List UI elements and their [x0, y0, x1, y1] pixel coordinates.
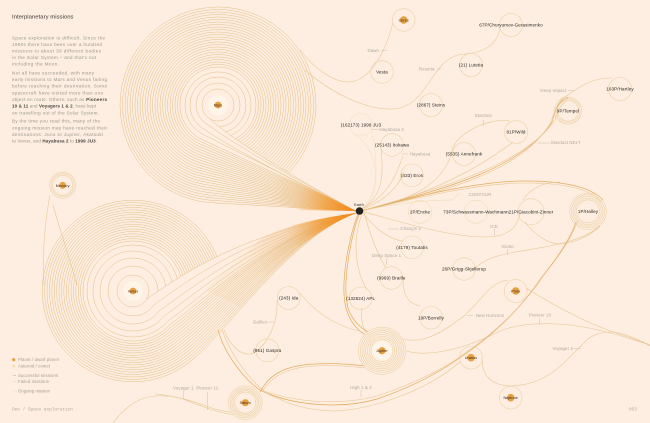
planet: Earth	[354, 203, 364, 215]
asteroid: Steins	[417, 94, 446, 116]
intro text: 1950s there have been over a hundred	[12, 42, 102, 47]
comet: Encke: 2P/Encke	[410, 209, 430, 214]
label: CONTOUR: CONTOUR	[469, 192, 491, 197]
Venus mission rings	[42, 200, 224, 382]
label: Pioneer 10	[529, 312, 552, 325]
label: Galileo: Galileo	[253, 320, 268, 324]
label: Giotto: Giotto	[502, 244, 514, 249]
asteroid: Steins: (2867) Steins	[417, 103, 446, 108]
comet: 67P	[479, 14, 543, 36]
Dawn path	[300, 22, 393, 82]
Venus mission trajectories	[147, 213, 356, 365]
comet: Hartley 2: 103P/Hartley	[606, 87, 634, 92]
Voyager 1 path	[113, 396, 240, 423]
asteroid: Braille	[377, 267, 406, 289]
planet: Venus: Venus	[128, 290, 138, 294]
intro text: before reaching their destination. Some	[12, 84, 107, 89]
intro text: Space exploration is difficult. Since the	[12, 35, 105, 40]
label: ICE: ICE	[490, 224, 498, 229]
Hayabusa and Eros paths	[362, 148, 404, 210]
planet: Saturn	[228, 386, 262, 420]
legend: ongoing: Ongoing mission	[18, 388, 51, 394]
asteroid: Lutetia: (21) Lutetia	[459, 63, 483, 68]
Chang'e 2 path	[362, 212, 402, 241]
comet: Grigg-Skjellerup	[442, 258, 486, 280]
comet: 67P: 67P/Churyumov-Gerasimenko	[479, 23, 543, 28]
label: Giotto	[502, 244, 514, 255]
label: Pioneer 10: Pioneer 10	[529, 312, 552, 318]
asteroid: Annefrank: (5535) Annefrank	[446, 152, 483, 157]
label: High 1 and 2	[350, 385, 372, 397]
label: Deep Space 1	[372, 253, 402, 265]
Mars mission rings	[120, 7, 316, 203]
legend: failed: Failed missions	[18, 379, 49, 384]
comet: Tempel 1	[554, 97, 582, 124]
comet: Giacobini-Zinner	[509, 199, 554, 225]
asteroid: Gaspra: (951) Gaspra	[253, 348, 282, 353]
planet: Venus	[123, 281, 143, 301]
asteroid: 1999 JU3: (162173) 1999 JU3	[341, 122, 382, 127]
planet: Jupiter	[358, 327, 406, 375]
page number: 053	[629, 406, 637, 412]
asteroid: Ida	[277, 286, 300, 310]
planet: Mercury: Mercury	[56, 184, 70, 188]
asteroid: APL	[346, 287, 376, 310]
planet: Uranus	[460, 346, 482, 369]
label: Pioneer 11	[196, 386, 219, 410]
mission paths: asteroids and comets	[300, 22, 612, 306]
label: Dawn: Dawn	[367, 48, 380, 53]
asteroid: Eros	[401, 164, 424, 187]
comet: Wild 2: 81P/Wild	[507, 130, 526, 135]
Messenger path	[43, 195, 77, 285]
label: Galileo	[253, 320, 274, 324]
label: Chang'e 2: Chang'e 2	[400, 226, 422, 231]
comet: Borrelly: 19P/Borrelly	[418, 315, 445, 320]
intro text: spacecraft have visited more than one	[12, 90, 103, 95]
planet: Neptune	[499, 386, 522, 409]
inner strand to Jupiter	[344, 214, 368, 336]
asteroid: Itokawa: (25143) Itokawa	[375, 143, 409, 148]
Giotto path	[473, 226, 600, 270]
asteroid: Gaspra	[253, 339, 282, 362]
label: Hayabusa 2: Hayabusa 2	[379, 127, 404, 132]
planet: Saturn: Saturn	[240, 401, 251, 405]
intro text: missions to about 38 different bodies	[12, 49, 102, 54]
comet: Wild 2	[504, 120, 528, 144]
label: Pioneer 11: Pioneer 11	[196, 386, 219, 390]
planet: Mars	[208, 95, 228, 115]
label: Hayabusa: Hayabusa	[410, 152, 431, 156]
Hayabusa 2 path	[356, 128, 376, 209]
comet: Schwassmann-Wachmann: 73P/Schwassmann-Wachmann	[443, 209, 509, 214]
Venus wedge glow	[205, 213, 356, 307]
comet: Hartley 2	[606, 78, 634, 100]
label: Dawn	[367, 48, 387, 53]
Saturn and Jupiter link	[260, 364, 365, 392]
label: Chang'e 2	[388, 226, 422, 231]
Pioneer 11 path	[155, 394, 245, 412]
asteroid: Braille: (9969) Braille	[377, 276, 406, 281]
label: New Horizons: New Horizons	[476, 313, 505, 318]
Deep Space 1 path	[364, 212, 420, 306]
label: High 1 and 2: High 1 & 2	[350, 385, 372, 390]
intro text: including the Moon.	[12, 62, 59, 67]
Pioneer 10 path	[403, 324, 650, 353]
intro text: early missions to Mars and Venus failing	[12, 77, 107, 82]
legend: asteroid: Asteroid / comet	[18, 364, 51, 368]
asteroid: Lutetia	[459, 54, 483, 76]
intro text: By the time you read this, many of the	[12, 119, 100, 124]
intro text	[12, 35, 108, 144]
comet: Encke	[408, 200, 432, 223]
planet: Earth: Earth	[354, 203, 364, 207]
label: Stardust: Stardust	[475, 113, 493, 118]
dwarf planet: Pluto: Pluto	[511, 290, 520, 294]
intro text: to Venus, and Hayabusa 2 to 1999 JU3.	[12, 139, 97, 144]
asteroid: Itokawa	[375, 134, 409, 156]
label: Stardust NExT: Stardust NExT	[551, 140, 581, 145]
intro text: ongoing mission may have reached their	[12, 125, 108, 130]
dwarf planet: Ceres	[392, 9, 415, 31]
Halley flyby arcs	[361, 181, 603, 211]
CONTOUR path	[362, 193, 459, 211]
asteroid: Vesta	[371, 61, 393, 83]
intro text: 10 & 11 and Voyagers 1 & 2, have kept	[12, 104, 97, 109]
comet: Borrelly	[418, 306, 445, 329]
asteroid: Toutatis	[396, 236, 428, 259]
High 1 and 2 path	[262, 362, 460, 411]
label: Deep Space 1: Deep Space 1	[372, 253, 402, 258]
dwarf planet: Pluto	[504, 280, 527, 302]
asteroid: Eros: (433) Eros	[401, 173, 424, 178]
title: Interplanetary missions	[12, 14, 74, 20]
comet: Halley: 1P/Halley	[578, 209, 599, 214]
label: Voyager 2: Voyager 2	[552, 346, 573, 351]
label: Deep Impact: Deep Impact	[540, 88, 567, 93]
legend: planet: Planet / dwarf planet	[18, 357, 60, 362]
intro text: on travelling out of the Solar System.	[12, 111, 99, 116]
label: Rosetta: Rosetta	[419, 66, 435, 72]
comet: Giacobini-Zinner: 21P/Giacobini-Zinner	[509, 209, 554, 214]
intro text: in the Solar System – and that's not	[12, 55, 97, 60]
Vega 1 and 2 path	[218, 222, 576, 405]
Galileo path	[224, 293, 358, 354]
comet: Halley	[570, 193, 606, 230]
Mars wedge glow	[255, 173, 356, 211]
planet: Neptune: Neptune	[503, 396, 518, 400]
intro text: Not all have succeeded, with many	[12, 70, 95, 75]
asteroid: Ida: (243) Ida	[279, 296, 299, 301]
planet: Uranus: Uranus	[465, 356, 477, 360]
label: Stardust NExT	[538, 140, 581, 145]
New Horizons path	[356, 214, 375, 338]
comet: Schwassmann-Wachmann	[443, 200, 509, 223]
label: Voyager 1: Voyager 1	[173, 386, 194, 390]
planet: Mercury	[50, 172, 76, 198]
label: Stardust	[475, 113, 493, 126]
planet: Mars: Mars	[214, 104, 222, 108]
planet: Jupiter: Jupiter	[376, 349, 388, 353]
asteroid: APL: (132524) APL	[346, 296, 376, 301]
asteroid: Toutatis: (4179) Toutatis	[396, 245, 428, 250]
Voyager 2 path	[482, 332, 650, 386]
asteroid: Annefrank	[446, 142, 483, 166]
Stardust path	[362, 121, 513, 211]
label: Voyager 1	[173, 386, 194, 399]
legend	[12, 357, 60, 394]
asteroid: Vesta: Vesta	[376, 70, 388, 75]
asteroid: 1999 JU3	[341, 113, 382, 136]
mission paths: outer planets	[43, 195, 650, 423]
mission labels	[173, 48, 581, 410]
ICE path	[361, 211, 600, 244]
Mars mission trajectories	[200, 118, 356, 211]
footer section: Dev / Space exploration	[12, 406, 73, 412]
label: ICE	[490, 224, 498, 236]
intro text: destinations: Juno to Jupiter, Akatsuki	[12, 132, 103, 137]
comet: Grigg-Skjellerup: 26P/Grigg-Skjellerup	[442, 267, 486, 272]
Rosetta path	[305, 28, 500, 109]
intro text: object en route. Others, such as Pioneers	[12, 97, 107, 102]
comet: Tempel 1: 9P/Tempel	[557, 108, 579, 113]
dwarf planet: Ceres: Ceres	[399, 18, 409, 22]
Deep Impact and Stardust NExT paths	[362, 98, 568, 211]
legend: successful: Successful missions	[18, 373, 58, 378]
